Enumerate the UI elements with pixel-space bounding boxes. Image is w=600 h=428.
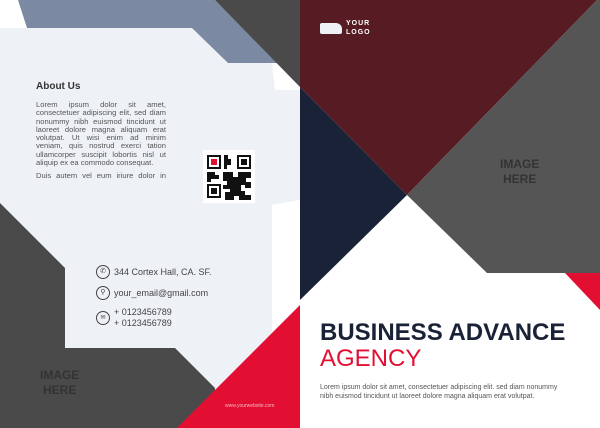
text block: about paragraph: Duis autem vel eum iriure dolor in (36, 171, 166, 180)
contact: address: 344 Cortex Hall, CA. SF. (114, 267, 212, 277)
logo: YOUR (346, 20, 370, 27)
contact: phones: ✉ (100, 314, 106, 320)
contact: phones: + 0123456789 (114, 318, 172, 328)
heading: About Us: About Us (36, 81, 80, 92)
text: image here right (500, 157, 539, 186)
text block: cover paragraph: Lorem ipsum dolor sit amet, consectetuer adipiscing elit. sed diam nonummy nibh euismod tincidunt ut laoreet dolore magna aliquam erat volutpat. (320, 384, 557, 400)
text: website: www.yourwebsite.com (225, 403, 274, 409)
shape: navy (300, 87, 407, 300)
shape: red bottom triangle (177, 305, 300, 428)
icon: QR code (203, 150, 255, 203)
contact: phones (96, 307, 172, 328)
text: image here left: IMAGE (40, 368, 79, 382)
shape: white wedge right (272, 200, 300, 345)
text block: about paragraph: Lorem ipsum dolor sit amet, consectetuer adipiscing elit, sed diam nonummy nibh euismod tincidunt ut laoreet dolore magna aliquam erat volutpat. Ut wisi enim ad minim veniam, quis nostrud exerci tation ullamcorper suscipit lobortis nisl ut aliquip ex ea commodo consequat. (36, 100, 166, 167)
subtitle: AGENCY (320, 345, 421, 372)
title: BUSINESS ADVANCE (320, 319, 565, 346)
panel: light left background (0, 28, 300, 428)
text: image here right: HERE (503, 172, 536, 186)
logo: LOGO (346, 29, 371, 36)
contact: address (96, 265, 212, 279)
shape: dark top right corner (215, 0, 300, 87)
contact: email (96, 286, 208, 300)
text: image here left (40, 368, 79, 397)
logo (320, 20, 371, 36)
contact: email: your_email@gmail.com (114, 288, 208, 298)
contact: address: ✆ (100, 268, 106, 275)
text: image here left: HERE (43, 383, 76, 397)
shape: red small triangle (565, 273, 600, 310)
shape: maroon (300, 0, 597, 195)
contact: email: ⚲ (100, 289, 106, 296)
text: image here right: IMAGE (500, 157, 539, 171)
contact: phones: + 0123456789 (114, 307, 172, 317)
shape: slate band (18, 0, 277, 63)
shape: grey image area (407, 0, 600, 273)
shape: dark bottom left (0, 203, 215, 428)
